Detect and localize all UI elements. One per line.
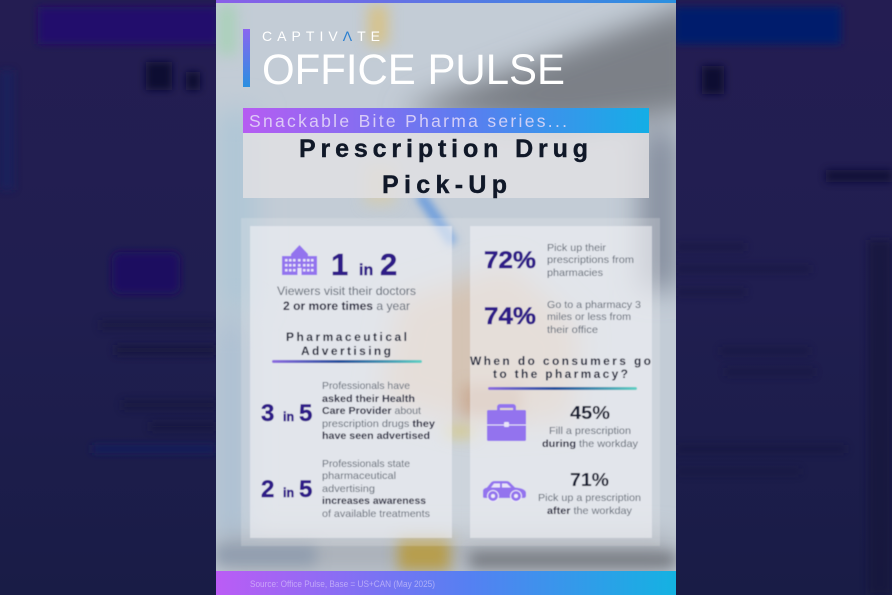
stat: 71% after workday: 71% (570, 470, 609, 490)
stat: 3 in 5: 5 (299, 400, 312, 427)
heading: Pharmaceutical Advertising: Pharmaceutical (286, 330, 407, 344)
stat: 72% pick up from pharmacies (484, 242, 634, 279)
top gradient strip (216, 0, 676, 3)
stat: 72% pick up from pharmacies: pharmacies (547, 267, 603, 279)
text: asked health care provider (322, 380, 435, 442)
text: awareness of treatments: Professionals state (322, 458, 410, 470)
icon: briefcase (487, 404, 526, 441)
stat: 72% pick up from pharmacies: Pick up their (547, 242, 607, 254)
text: awareness of treatments: advertising (322, 483, 375, 495)
stat: 3 in 5 (261, 400, 312, 427)
stat: 45% during workday: during the workday (542, 438, 639, 450)
banner: series label: Snackable Bite Pharma series... (249, 111, 567, 131)
stat: 71% after workday (538, 470, 641, 517)
stat: 2 in 5: 5 (299, 476, 312, 503)
stat: 74% within 3 miles: Go to a pharmacy 3 (547, 299, 641, 311)
footer: source: Source: Office Pulse, Base = US+CAN (May 2025) (250, 579, 435, 590)
stat: 1 in 2: 1 (331, 247, 348, 282)
text: asked health care provider: have seen advertised (322, 430, 430, 442)
text: asked health care provider: Care Provider about (322, 405, 421, 417)
text: awareness of treatments: increases awareness (322, 495, 426, 507)
text: doctor visits: Viewers visit their doctors (277, 284, 416, 298)
text: asked health care provider: Professionals have (322, 380, 410, 392)
stat: 74% within 3 miles: miles or less from (547, 311, 631, 323)
icon: car (483, 481, 526, 502)
stat: 74% within 3 miles (484, 299, 641, 336)
stat: 74% within 3 miles: their office (547, 324, 598, 336)
stat: 1 in 2 (331, 247, 397, 282)
stat: 1 in 2: in (359, 262, 373, 279)
stat: 2 in 5 (261, 476, 312, 503)
panel: left statistics (241, 218, 462, 546)
title: Pick-Up (382, 171, 507, 199)
text: awareness of treatments (322, 458, 430, 520)
banner: series label (243, 108, 649, 133)
logo: Captivate Office Pulse: OFFICE PULSE (262, 47, 565, 94)
title: Prescription Drug (299, 135, 588, 163)
stat: 72% pick up from pharmacies: 72% (484, 247, 536, 274)
heading: Pharmaceutical Advertising: Advertising (301, 344, 391, 358)
panel: right statistics (462, 218, 660, 546)
footer: source (216, 571, 676, 595)
stat: 1 in 2: 2 (380, 247, 397, 282)
text: doctor visits (277, 284, 416, 313)
stat: 45% during workday (542, 403, 639, 450)
stat: 45% during workday: 45% (570, 403, 610, 423)
stat: 45% during workday: Fill a prescription (549, 425, 631, 437)
stat: 3 in 5: in (283, 410, 294, 424)
text: awareness of treatments: pharmaceutical (322, 470, 396, 482)
stat: 3 in 5: 3 (261, 400, 274, 427)
logo: Captivate Office Pulse (243, 28, 565, 94)
stat: 71% after workday: Pick up a prescription (538, 492, 641, 504)
stat: 72% pick up from pharmacies: prescriptions from (547, 254, 634, 266)
stat: 2 in 5: 2 (261, 476, 274, 503)
stat: 71% after workday: after the workday (547, 505, 633, 517)
text: asked health care provider: prescription drugs they (322, 418, 435, 430)
text: doctor visits: 2 or more times a year (283, 299, 410, 313)
logo: Captivate Office Pulse: CAPTIV Λ TE (262, 28, 380, 44)
heading: When do consumers go to the pharmacy: to the pharmacy? (493, 367, 628, 381)
text: asked health care provider: asked their Health (322, 393, 415, 405)
heading: When do consumers go to the pharmacy: When do consumers go (470, 354, 651, 368)
icon: school building (282, 245, 317, 275)
stat: 74% within 3 miles: 74% (484, 303, 536, 330)
text: awareness of treatments: of available treatments (322, 508, 430, 520)
stat: 2 in 5: in (283, 486, 294, 500)
title (243, 133, 649, 199)
heading: When do consumers go to the pharmacy (470, 354, 651, 390)
poster photo background: pharmacy scene (216, 0, 700, 595)
heading: Pharmaceutical Advertising (272, 330, 422, 363)
